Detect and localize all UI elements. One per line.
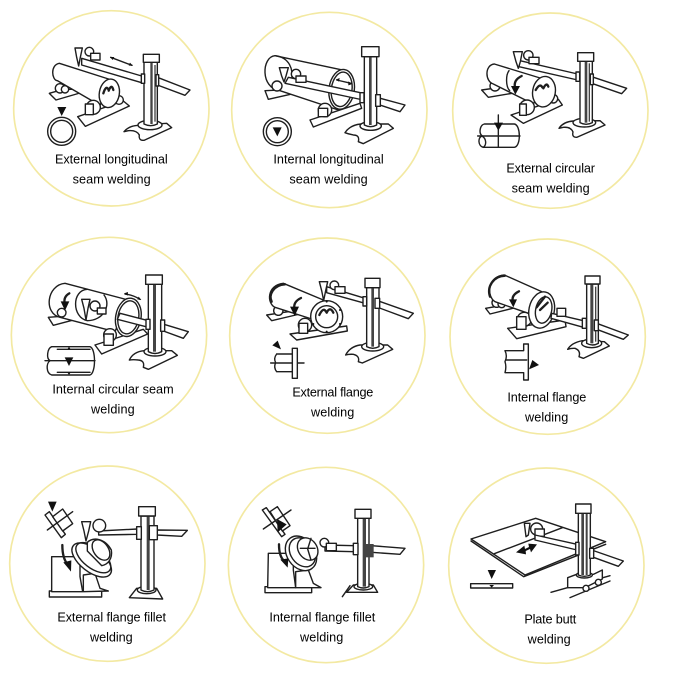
caption: seam welding (73, 173, 151, 187)
panel: internal longitudinal seam welding (232, 12, 427, 208)
panel: external flange welding (230, 238, 425, 433)
diagram: column and boom inside tilted positioner (265, 509, 405, 597)
caption (292, 386, 373, 420)
caption: welding (299, 631, 343, 645)
diagram: column and boom over tilted positioner (49, 507, 187, 599)
caption: External flange fillet (57, 611, 166, 625)
panel: internal flange welding (450, 239, 645, 434)
caption: seam welding (512, 182, 590, 196)
panel: internal flange fillet welding (228, 467, 424, 663)
caption: External longitudinal (55, 153, 168, 167)
icon: fillet section with arrow (45, 502, 73, 538)
caption: welding (89, 631, 133, 645)
panel: plate butt welding (449, 468, 644, 663)
caption: welding (524, 410, 568, 424)
panel: external flange fillet welding (10, 466, 205, 661)
icon: ring joint with internal arrow (263, 118, 291, 146)
caption (52, 383, 174, 417)
caption: Internal circular seam (52, 383, 174, 397)
caption: welding (90, 403, 135, 417)
caption: welding (310, 406, 354, 420)
caption (55, 153, 168, 187)
caption: welding (527, 633, 571, 647)
diagram: column and boom over rotating pipe (482, 51, 627, 137)
icon: flange section with arrow (271, 341, 304, 378)
panel: internal circular seam welding (11, 237, 207, 433)
caption: Internal longitudinal (273, 153, 384, 167)
diagram: column and boom inside rotating pipe (48, 275, 188, 369)
diagram: column and boom on rails over plate (471, 504, 623, 598)
caption (507, 390, 586, 424)
caption: External flange (292, 386, 373, 400)
caption (524, 613, 577, 647)
caption (273, 153, 384, 187)
caption: External circular (506, 162, 595, 176)
diagram: column and boom over flange (267, 278, 413, 363)
panel: external circular seam welding (453, 13, 648, 208)
caption (506, 162, 595, 196)
icon: ring joint with weld arrow (48, 107, 76, 145)
caption: Internal flange (507, 390, 586, 404)
icon: internal flange section with arrow (505, 344, 539, 380)
icon: fillet section with arrow (262, 507, 291, 537)
caption: Internal flange fillet (269, 611, 376, 625)
caption: seam welding (289, 173, 368, 187)
caption (57, 611, 166, 645)
diagram: column and boom with pipe (49, 47, 190, 140)
panel: external longitudinal seam welding (14, 11, 209, 206)
caption: Plate butt (524, 613, 577, 627)
diagram: column and boom inside flange (486, 275, 628, 358)
icon: circular seam on pipe with arrow (478, 115, 520, 147)
icon: butt joint with arrow (471, 570, 513, 588)
diagram: column and boom inside pipe (265, 47, 405, 144)
icon: pipe with internal seam arrow (45, 347, 95, 375)
caption (269, 611, 376, 645)
